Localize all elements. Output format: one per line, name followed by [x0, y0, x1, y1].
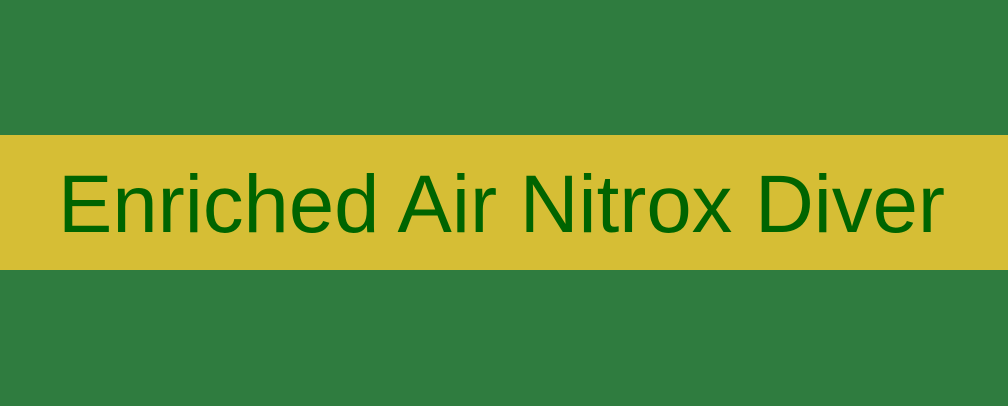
title: Enriched Air Nitrox Diver: [58, 159, 945, 250]
